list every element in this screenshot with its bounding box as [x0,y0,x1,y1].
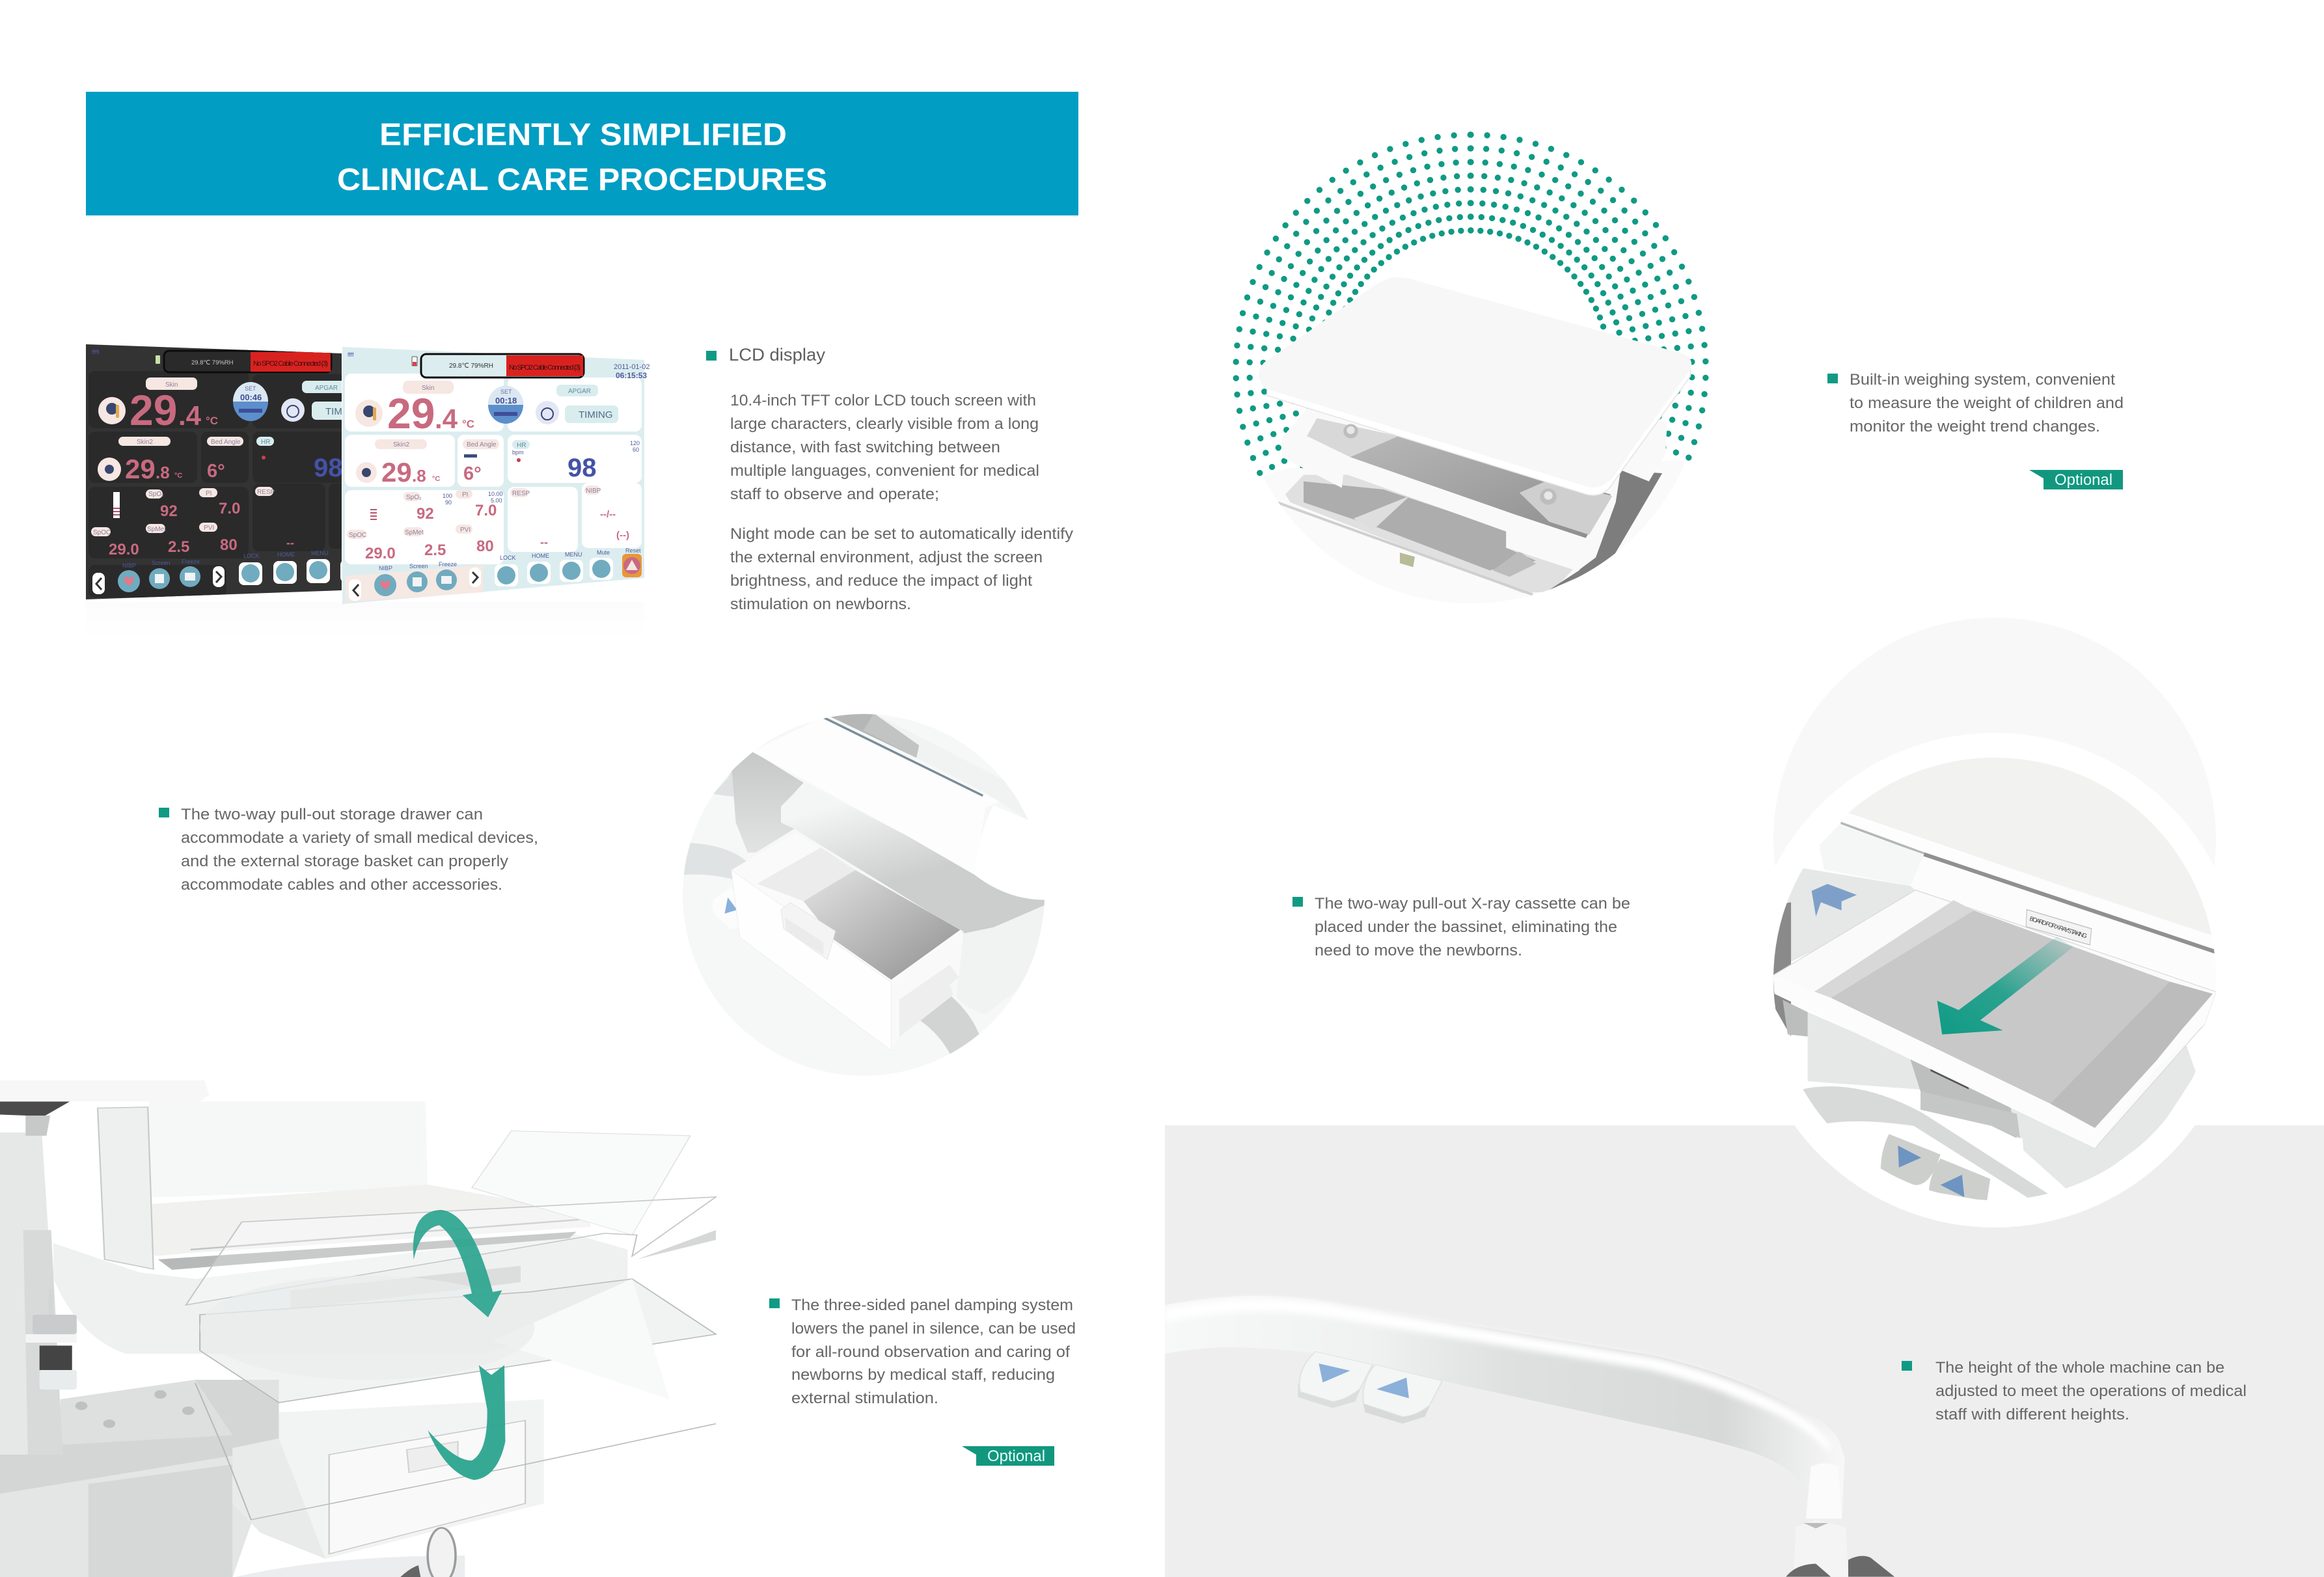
LCD screen: day mode: -- [540,536,548,549]
LCD screen: night mode [86,344,359,599]
dotted halo behind weighing system [1236,135,1706,605]
label: board for x-ray: BOARD FOR X-RAY'S TAKING [2029,915,2088,940]
LCD screen: night mode: PVI [204,525,214,532]
LCD screen: day mode: 5.00 [491,497,502,504]
LCD screen: day mode: Reset [625,547,641,554]
LCD screen: day mode: °C [432,475,440,483]
LCD screen: day mode: APGAR [568,388,591,395]
LCD screen: day mode: MENU [565,551,582,558]
LCD screen: night mode: TIMING [325,406,359,417]
LCD screen: day mode: TIMING [579,409,613,420]
LCD screen: night mode: 29.0 [109,541,139,558]
LCD screen: day mode: 90 [445,499,452,506]
LCD screen: day mode: SpO₂ [406,494,422,501]
LCD screen: day mode: HR [517,442,526,449]
white ring around X-ray photo [1747,733,2242,1227]
LCD screen: day mode: --/-- [600,509,616,520]
LCD screen: day mode: (--) [616,530,629,541]
text block: weighing system: monitor the weight trend changes. [1850,418,2100,435]
LCD screen: night mode: Screen [152,560,171,566]
LCD screen: day mode: NIBP [586,487,601,495]
text block: storage drawer: The two-way pull-out storage drawer can [181,806,483,823]
text block: panel damping system: lowers the panel in silence, can be used [791,1320,1076,1337]
text block: LCD display: large characters, clearly visible from a long [730,415,1039,433]
text block: LCD display: Night mode can be set to automatically identify [730,525,1074,543]
LCD screen: day mode: 00:18 [495,396,517,405]
tag: Optional (panel) [962,1446,1054,1466]
tag: Optional (panel): Optional [987,1447,1045,1465]
LCD screen: day mode: 98 [567,454,596,482]
LCD screen: day mode: .8 [412,466,426,486]
LCD screen: day mode: ffff [348,351,354,358]
bullet: height [1902,1361,1912,1371]
LCD screen: night mode: Skin2 [137,439,153,446]
LCD screen: day mode: Freeze [439,561,457,568]
text block: panel damping system: The three-sided panel damping system [791,1296,1073,1314]
text block: LCD display: multiple languages, convenient for medical [730,462,1039,480]
LCD screen: day mode: 06:15:53 [616,371,647,380]
text block: LCD display: stimulation on newborns. [730,596,911,613]
LCD screen: day mode: 60 [633,446,639,453]
LCD screen: day mode: Skin [422,385,434,392]
LCD screen: night mode: LOCK [243,553,260,559]
LCD screen: night mode: 98 [314,454,342,482]
text block: LCD display [706,345,1074,613]
LCD screen: day mode: 29 [381,457,412,487]
LCD screen: night mode: °C [206,415,218,427]
text block: panel damping system [769,1296,1076,1407]
LCD screen: day mode: RESP [512,490,530,497]
text block: LCD display: brightness, and reduce the impact of light [730,572,1032,590]
LCD screen: day mode: 92 [417,505,434,523]
LCD screen: night mode: -- [286,536,294,549]
LCD screen: day mode: Mute [597,549,610,556]
LCD screen: day mode: .4 [435,404,458,434]
photo: storage drawer [683,713,1045,1076]
LCD screen: night mode: APGAR [315,385,338,392]
LCD screen: day mode: HOME [532,553,549,559]
LCD screen: day mode: 100 [443,493,452,499]
bullet: panel [769,1298,780,1308]
text block: LCD display: staff to observe and operate; [730,486,939,503]
LCD screen: day mode: 6° [463,463,482,484]
text block: storage drawer: and the external storage basket can properly [181,853,509,870]
LCD screen: day mode: 29 [387,389,435,437]
LCD screen: night mode: HOME [277,551,295,558]
LCD screen: night mode: 2.5 [168,538,189,556]
text block: storage drawer: accommodate cables and other accessories. [181,876,502,894]
bullet: LCD display [706,351,717,361]
title banner: CLINICAL CARE PROCEDURES [337,163,827,197]
LCD screen: night mode: 7.0 [219,500,240,517]
text block: height adjustment [1902,1359,2247,1423]
text block: weighing system: to measure the weight of children and [1850,394,2124,412]
LCD screen: night mode: MENU [311,550,328,556]
text block: panel damping system: for all-round observation and caring of [791,1343,1070,1361]
LCD screen: night mode: .4 [178,400,202,431]
LCD screen: day mode: No SPO2 Cable Connected (3) [509,364,581,372]
text block: height adjustment: adjusted to meet the operations of medical [1935,1382,2247,1400]
LCD screen: night mode: 29 [130,386,177,434]
text block: LCD display: LCD display [729,345,826,364]
LCD screen: night mode: 6° [207,461,225,482]
LCD screen: day mode: Skin2 [393,441,409,448]
LCD screen: night mode: PI [206,490,212,497]
LCD screen: day mode: 2011-01-02 [614,363,649,371]
LCD screen: day mode: SpOC [349,532,366,539]
text block: LCD display: 10.4-inch TFT color LCD touch screen with [730,392,1036,409]
LCD screen: night mode: 29.8℃ 79%RH [191,359,234,366]
tag: Optional (weighing): Optional [2055,471,2112,489]
LCD screen: day mode: Bed Angle [467,441,497,448]
LCD screen: night mode: SpMet [147,526,166,533]
photo: weighing system [1259,277,1691,622]
text block: LCD display: distance, with fast switching between [730,439,1000,456]
pale arch behind X-ray photo [1773,618,2216,1060]
LCD screen: day mode: °C [462,418,474,430]
text block: panel damping system: newborns by medical staff, reducing [791,1366,1055,1384]
panel: grey lower-right background [1165,1125,2324,1577]
LCD screen: day mode: SET [500,389,512,395]
LCD screen: night mode: .8 [156,463,170,482]
bullet: drawer [159,808,169,817]
photo: height-adjust pedal frame [1165,1296,1894,1577]
LCD screen: night mode: ffffl [92,349,100,355]
LCD screen: day mode: 120 [630,440,640,446]
LCD screen: night mode: Freeze [182,558,200,565]
text block: X-ray cassette: placed under the bassinet, eliminating the [1315,918,1617,936]
LCD screen: night mode: Bed Angle [211,439,241,446]
LCD screen: night mode: RESP [257,489,275,496]
text block: X-ray cassette [1292,895,1630,959]
LCD screen: day mode: 29.0 [365,545,396,562]
text block: panel damping system: external stimulation. [791,1390,938,1407]
LCD screen: night mode: NIBP [122,562,136,569]
LCD screen: day mode: SpMet [405,529,424,536]
LCD screen: day mode: 7.0 [475,502,497,519]
title banner [86,92,1078,215]
photo: three-sided panel damping system [0,1080,716,1577]
LCD screen: day mode: 80 [476,538,494,555]
text block: storage drawer [159,806,538,894]
LCD screen: night mode: 92 [160,502,178,520]
title banner: EFFICIENTLY SIMPLIFIED [379,118,787,152]
text block: X-ray cassette: The two-way pull-out X-ray cassette can be [1315,895,1630,912]
LCD screen: day mode: 2.5 [424,542,446,559]
LCD screen: night mode: 80 [220,536,238,554]
text block: LCD display: the external environment, adjust the screen [730,549,1043,566]
LCD screen: night mode: Skin [165,381,178,389]
LCD screen: day mode: LOCK [500,555,516,561]
LCD screen: day mode: 29.8℃ 79%RH [449,363,493,370]
bullet: weighing [1827,374,1838,383]
LCD screen: day mode: 10.00 [488,491,503,497]
LCD screen: day mode: NIBP [379,565,392,571]
LCD screen: day mode [342,347,649,604]
text block: weighing system [1827,371,2124,435]
LCD screen: night mode: 29 [125,454,156,484]
LCD screen: day mode: bpm [512,449,524,456]
LCD screen: day mode: PI [462,491,468,499]
LCD screen: day mode: Screen [409,563,428,569]
tag: Optional (weighing) [2029,470,2123,489]
text block: X-ray cassette: need to move the newborns. [1315,942,1522,959]
LCD screen: night mode: SET [245,385,256,392]
LCD screen: night mode: 00:46 [240,392,262,402]
LCD screen: night mode: No SPO2 Cable Connected (3) [253,360,328,368]
arrow: upper rotation [413,1210,502,1317]
LCD screen: night mode: °C [174,472,182,480]
bullet: X-ray [1292,897,1303,907]
text block: weighing system: Built-in weighing system, convenient [1850,371,2115,389]
LCD screen: night mode: HR [261,439,270,446]
screen reflection [86,602,644,641]
LCD screen: night mode: SpOC [93,529,111,536]
text block: height adjustment: The height of the whole machine can be [1935,1359,2224,1377]
text block: height adjustment: staff with different heights. [1935,1406,2129,1423]
photo: X-ray cassette tray [1773,758,2215,1200]
LCD screen: day mode: PVI [460,527,471,534]
text block: storage drawer: accommodate a variety of small medical devices, [181,829,538,847]
arrow: lower rotation [428,1365,505,1480]
LCD screen: night mode: SpO₂ [148,491,164,498]
white cover hiding the lower halo [1224,456,1718,625]
